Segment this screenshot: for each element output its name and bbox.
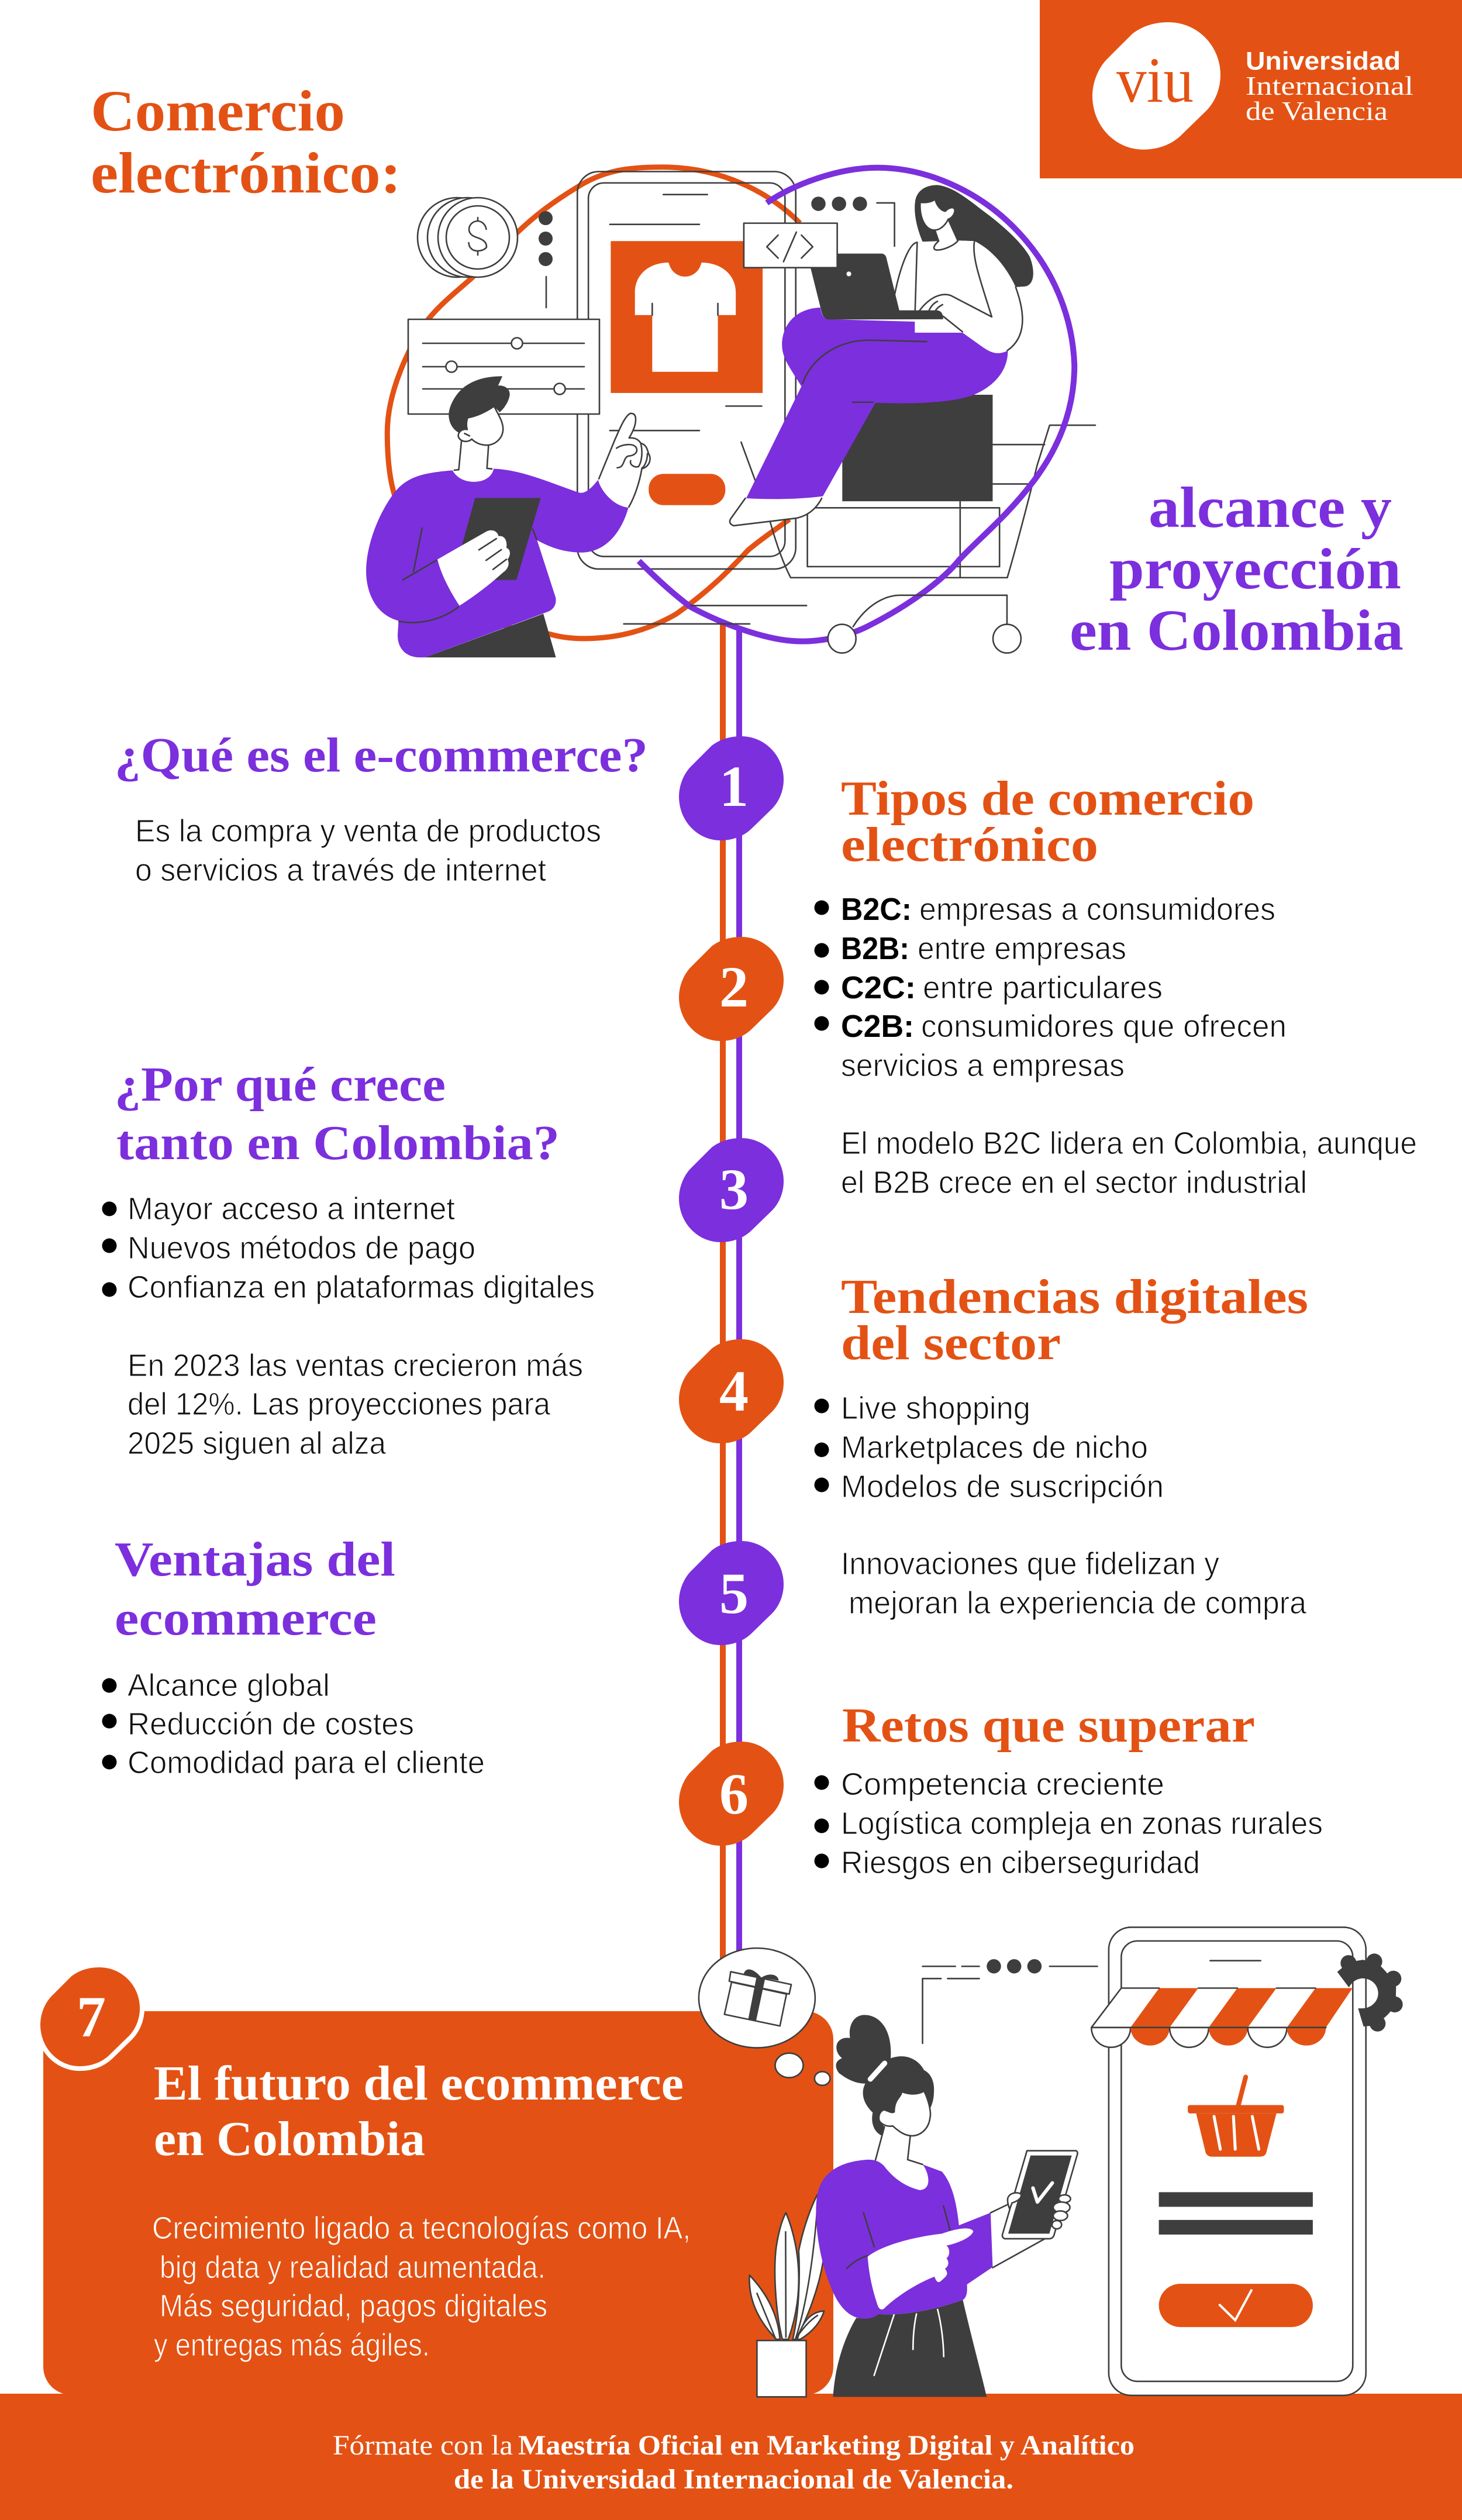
footer text: Fórmate con la bbox=[333, 2430, 513, 2461]
subtitle: alcance y bbox=[1149, 475, 1392, 540]
section 3: por que crece: Confianza en plataformas digitales bbox=[127, 1270, 595, 1305]
section 2: tipos de comercio electronico: entre empresas bbox=[918, 931, 1126, 966]
section 2: tipos de comercio electronico: B2C: bbox=[841, 892, 912, 927]
plant bbox=[749, 2195, 825, 2397]
logo block: de Valencia bbox=[1246, 96, 1388, 126]
section 4: tendencias digitales bbox=[814, 1270, 1308, 1621]
phone, cart and seated woman bbox=[387, 167, 1095, 642]
panel: footer band bbox=[0, 2394, 1462, 2520]
section 2: tipos de comercio electronico: Tipos de comercio bbox=[841, 771, 1254, 826]
section 5: ventajas del ecommerce: Ventajas del bbox=[115, 1532, 395, 1587]
title bbox=[91, 78, 401, 205]
number 5 bbox=[679, 1541, 784, 1645]
title: electrónico: bbox=[91, 140, 401, 205]
section 4: tendencias digitales: Marketplaces de nicho bbox=[841, 1430, 1148, 1465]
number 2 bbox=[679, 937, 784, 1041]
section 3: por que crece: Nuevos métodos de pago bbox=[127, 1230, 475, 1266]
section 4: tendencias digitales: del sector bbox=[841, 1316, 1061, 1370]
number 3: 3 bbox=[719, 1157, 749, 1222]
section 3: por que crece bbox=[102, 1057, 595, 1461]
section 1: que es el e-commerce bbox=[115, 728, 648, 888]
logo block bbox=[1040, 0, 1462, 178]
section 3: por que crece: ¿Por qué crece bbox=[115, 1057, 446, 1112]
icon: code window bbox=[744, 223, 837, 268]
section 6: retos que superar: Retos que superar bbox=[842, 1698, 1255, 1753]
number 5: 5 bbox=[719, 1561, 749, 1626]
section 2: tipos de comercio electronico: el B2B crece en el sector industrial bbox=[841, 1165, 1307, 1200]
man with tablet bbox=[366, 376, 650, 657]
section 6: retos que superar: Logística compleja en zonas rurales bbox=[841, 1806, 1323, 1841]
section 3: por que crece: del 12%. Las proyecciones para bbox=[127, 1387, 551, 1422]
section 6: retos que superar bbox=[814, 1698, 1323, 1880]
number 6 bbox=[679, 1742, 784, 1846]
awning bbox=[1091, 1988, 1353, 2047]
section 5: ventajas del ecommerce: Alcance global bbox=[127, 1668, 330, 1703]
thought bubble with gift bbox=[699, 1948, 830, 2085]
section 4: tendencias digitales: Live shopping bbox=[841, 1391, 1030, 1426]
section 3: por que crece: Mayor acceso a internet bbox=[127, 1191, 455, 1226]
panel: el futuro del ecommerce: Crecimiento ligado a tecnologías como IA, bbox=[152, 2211, 691, 2246]
panel: el futuro del ecommerce: El futuro del ecommerce bbox=[154, 2056, 684, 2111]
section 2: tipos de comercio electronico: servicios a empresas bbox=[841, 1048, 1125, 1083]
number 6: 6 bbox=[719, 1761, 749, 1826]
section 2: tipos de comercio electronico bbox=[814, 771, 1417, 1200]
timeline lines bbox=[720, 624, 742, 1969]
footer text: de la Universidad Internacional de Valencia. bbox=[454, 2464, 1013, 2495]
section 6: retos que superar: Riesgos en ciberseguridad bbox=[841, 1845, 1200, 1880]
section 1: que es el e-commerce: ¿Qué es el e-commerce? bbox=[115, 728, 648, 782]
panel: el futuro del ecommerce: y entregas más ágiles. bbox=[154, 2328, 430, 2363]
logo block: Universidad bbox=[1246, 47, 1401, 75]
icon: basket bbox=[1188, 2077, 1284, 2157]
number 2: 2 bbox=[719, 954, 749, 1019]
section 4: tendencias digitales: Modelos de suscripción bbox=[841, 1469, 1164, 1504]
cart wheels and lower lines bbox=[624, 595, 1021, 653]
section 5: ventajas del ecommerce: ecommerce bbox=[115, 1591, 377, 1646]
section 1: que es el e-commerce: Es la compra y venta de productos bbox=[135, 813, 601, 849]
section 2: tipos de comercio electronico: empresas a consumidores bbox=[919, 892, 1275, 927]
section 2: tipos de comercio electronico: consumidores que ofrecen bbox=[921, 1009, 1287, 1044]
section 5: ventajas del ecommerce: Comodidad para el cliente bbox=[127, 1745, 485, 1780]
button with check bbox=[1159, 2284, 1313, 2327]
number 1 bbox=[679, 736, 784, 840]
section 4: tendencias digitales: Innovaciones que fidelizan y bbox=[841, 1546, 1219, 1581]
closing illustration bbox=[699, 1927, 1403, 2397]
section 2: tipos de comercio electronico: C2B: bbox=[841, 1009, 914, 1044]
number 1: 1 bbox=[719, 754, 749, 819]
section 6: retos que superar: Competencia creciente bbox=[841, 1767, 1164, 1802]
panel: el futuro del ecommerce: Más seguridad, pagos digitales bbox=[160, 2288, 547, 2323]
number 4 bbox=[679, 1339, 784, 1443]
section 5: ventajas del ecommerce: Reducción de costes bbox=[127, 1707, 414, 1742]
section 4: tendencias digitales: mejoran la experiencia de compra bbox=[849, 1585, 1307, 1621]
subtitle: en Colombia bbox=[1070, 598, 1404, 663]
number 7 bbox=[40, 1967, 140, 2066]
icon: gear bbox=[1337, 1953, 1403, 2032]
footer text bbox=[333, 2430, 1135, 2495]
woman with phone bbox=[816, 2015, 1078, 2397]
section 2: tipos de comercio electronico: electrónico bbox=[841, 818, 1098, 872]
panel: el futuro del ecommerce bbox=[40, 1967, 833, 2395]
section 5: ventajas del ecommerce bbox=[102, 1532, 485, 1780]
section 2: tipos de comercio electronico: B2B: bbox=[841, 931, 909, 966]
section 3: por que crece: En 2023 las ventas crecieron más bbox=[127, 1348, 583, 1383]
section 1: que es el e-commerce: o servicios a través de internet bbox=[135, 853, 546, 888]
logo block: viu bbox=[1116, 44, 1194, 116]
panel: el futuro del ecommerce: big data y realidad aumentada. bbox=[160, 2250, 546, 2285]
shop phone bbox=[1091, 1927, 1403, 2395]
logo block: Internacional bbox=[1246, 71, 1413, 101]
number 4: 4 bbox=[719, 1359, 749, 1423]
woman, bubble and plant bbox=[699, 1948, 1098, 2397]
section 4: tendencias digitales: Tendencias digitales bbox=[841, 1270, 1308, 1324]
panel: el futuro del ecommerce: en Colombia bbox=[154, 2112, 425, 2166]
panel: sliders bbox=[408, 319, 599, 414]
subtitle: proyección bbox=[1109, 536, 1401, 601]
section 2: tipos de comercio electronico: C2C: bbox=[841, 970, 916, 1005]
number 7: 7 bbox=[77, 1984, 106, 2049]
footer text: Maestría Oficial en Marketing Digital y Analítico bbox=[518, 2430, 1135, 2461]
tablet with check bbox=[1002, 2151, 1078, 2239]
section 3: por que crece: tanto en Colombia? bbox=[116, 1116, 560, 1170]
section 3: por que crece: 2025 siguen al alza bbox=[127, 1426, 387, 1461]
hero illustration bbox=[366, 167, 1095, 657]
subtitle bbox=[1070, 475, 1404, 663]
number 3 bbox=[679, 1138, 784, 1242]
section 2: tipos de comercio electronico: El modelo B2C lidera en Colombia, aunque bbox=[841, 1126, 1417, 1161]
section 2: tipos de comercio electronico: entre particulares bbox=[923, 970, 1163, 1005]
title: Comercio bbox=[91, 78, 345, 143]
icon: coin stack bbox=[418, 198, 518, 277]
